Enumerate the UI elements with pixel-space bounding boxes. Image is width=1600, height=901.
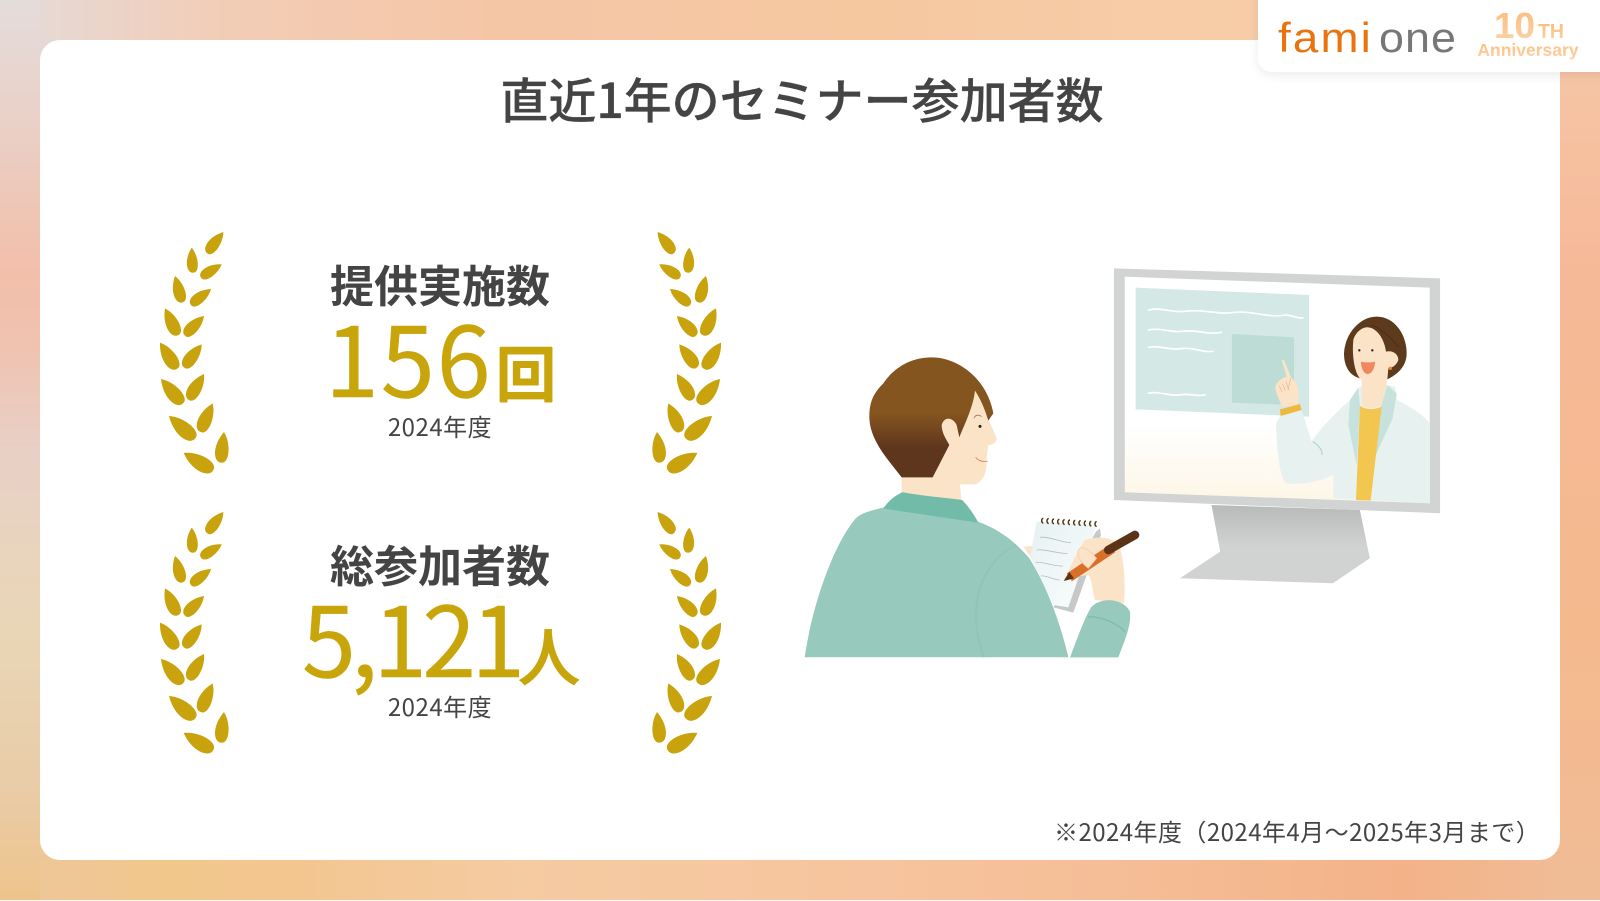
logo panel	[1258, 0, 1600, 72]
writing hand and pen	[1064, 535, 1135, 657]
stat block: seminars held	[154, 228, 727, 477]
logo wordmark: fami: fami	[1278, 14, 1373, 61]
stat period: 2024年度	[388, 688, 492, 723]
stat label: 提供実施数	[330, 251, 550, 315]
stat value: 5,121	[302, 564, 520, 705]
logo wordmark: one: one	[1379, 14, 1457, 61]
icon: right laurel	[651, 508, 727, 757]
icon: left laurel	[154, 228, 230, 477]
icon: right laurel	[651, 228, 727, 477]
man's torso	[805, 492, 1068, 657]
stat value: 156	[325, 284, 493, 425]
stat block: total participants	[154, 508, 727, 757]
title: 直近1年のセミナー参加者数	[500, 62, 1104, 132]
man's head	[869, 357, 997, 503]
footnote: ※2024年度（2024年4月～2025年3月まで）	[1054, 813, 1540, 848]
anniversary badge: Anniversary	[1477, 40, 1579, 60]
stat period: 2024年度	[388, 408, 492, 443]
stat label: 総参加者数	[330, 531, 550, 595]
anniversary badge: 10	[1494, 5, 1535, 46]
presenter on screen	[1275, 317, 1430, 503]
monitor	[1114, 268, 1440, 583]
icon: left laurel	[154, 508, 230, 757]
stat unit: 人	[518, 608, 580, 698]
anniversary badge: TH	[1538, 21, 1564, 43]
notepad	[1023, 518, 1101, 613]
anniversary badge	[1477, 5, 1579, 60]
stat unit: 回	[496, 328, 556, 414]
illustration: man watching online seminar	[805, 268, 1440, 657]
